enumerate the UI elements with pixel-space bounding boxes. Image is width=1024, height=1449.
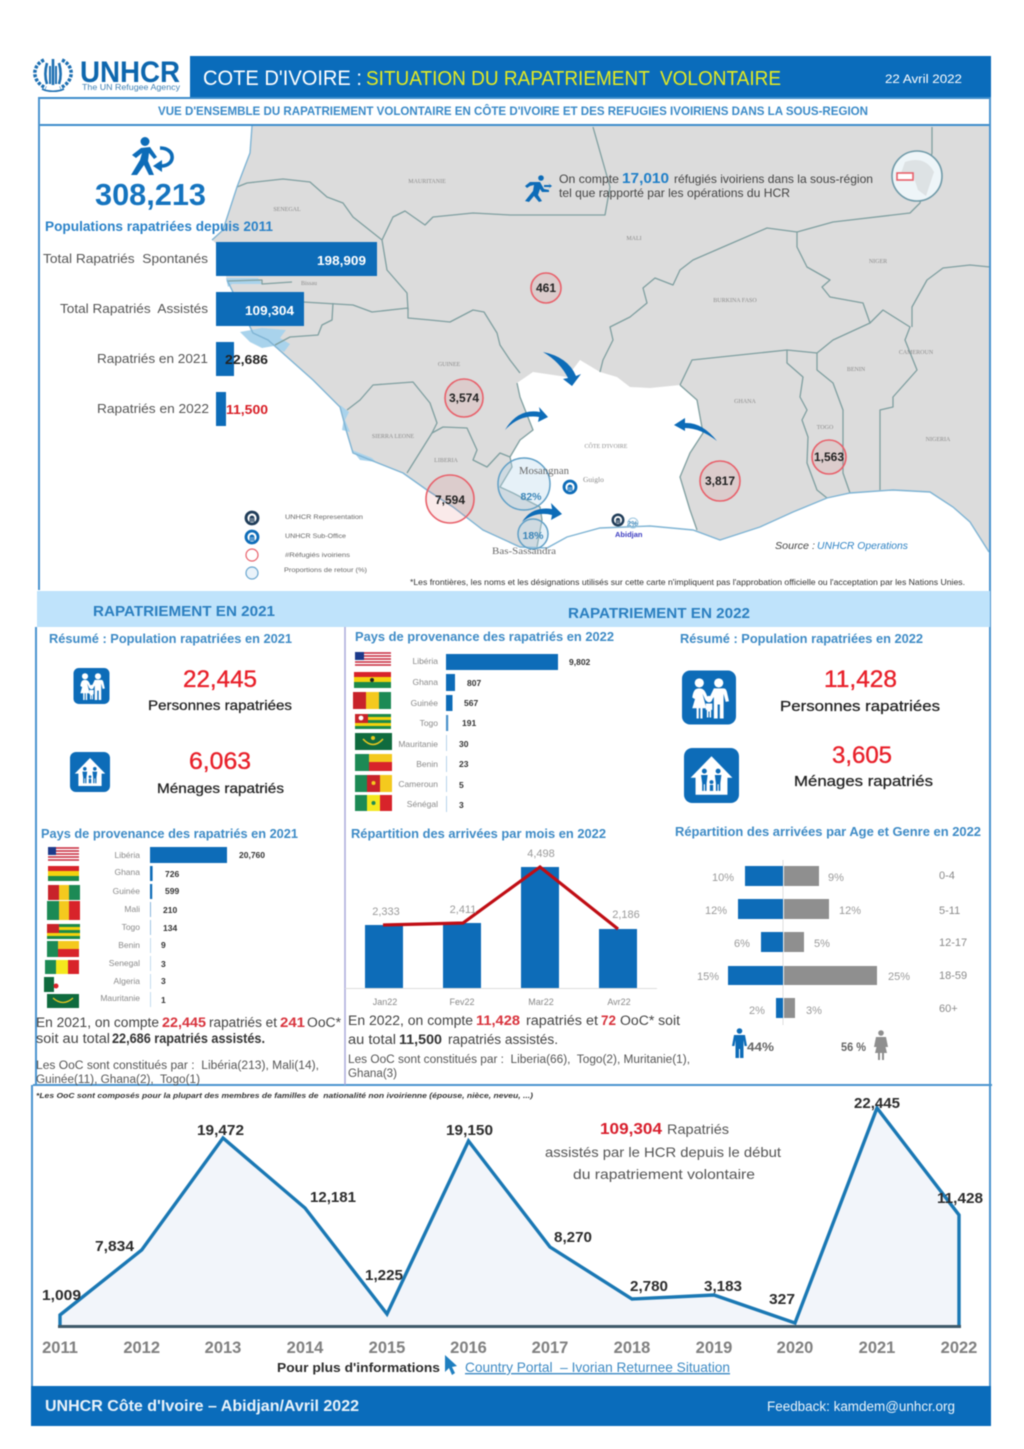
data labels <box>42 1096 983 1308</box>
refugee count circles <box>426 273 846 523</box>
year labels: 2017 <box>532 1339 568 1357</box>
country labels: Togo <box>122 922 140 932</box>
inset globe <box>892 151 942 201</box>
line <box>60 1108 959 1326</box>
persons repatriated: 22,445 <box>183 666 257 693</box>
country labels: Algeria <box>114 976 140 986</box>
text block: 2021 summary: 22,445 <box>162 1015 207 1030</box>
values: 9 <box>161 940 166 950</box>
map panel <box>212 126 990 587</box>
text block: 2022 summary: OoC* soit <box>620 1013 680 1028</box>
heading: 2022: RAPATRIEMENT EN 2022 <box>568 605 750 622</box>
country labels: Mali <box>124 904 140 914</box>
text block: 2021 summary: Les OoC sont constitués par : Libéria(213), Mali(14), <box>36 1060 319 1072</box>
panel: summary 2021: Résumé : Population rapatriées en 2021 <box>49 631 292 646</box>
map legend: #Réfugiés ivoiriens <box>285 553 350 559</box>
values: 3 <box>161 959 166 969</box>
values: 20,760 <box>239 850 265 860</box>
country labels: Mauritanie <box>398 739 438 749</box>
year labels: 2022 <box>941 1339 977 1357</box>
refugees in sub-region callout: tel que rapporté par les opérations du HCR <box>559 186 790 200</box>
source: UNHCR Operations <box>817 540 909 552</box>
footer <box>31 1386 991 1426</box>
title: COTE D'IVOIRE : <box>203 67 362 90</box>
bar chart: repatriation totals: Rapatriés en 2021 <box>97 351 208 366</box>
refugees in sub-region callout: On compte <box>559 172 619 186</box>
text block: 2022 summary <box>348 1013 690 1080</box>
date: 22 Avril 2022 <box>885 74 962 86</box>
bar chart: repatriation totals: Total Rapatriés Spontanés <box>43 251 209 266</box>
refugees in sub-region callout: réfugiés ivoiriens dans la sous-région <box>674 172 873 186</box>
text block: 2022 summary: Les OoC sont constitués par : Liberia(66), Togo(2), Muritanie(1), <box>348 1054 690 1066</box>
values <box>459 657 591 810</box>
bar chart: countries 2022 <box>446 654 558 812</box>
return share circles <box>498 458 550 549</box>
icon: male <box>732 1028 747 1058</box>
panel: origin countries 2021: Pays de provenance des rapatriés en 2021 <box>41 826 298 841</box>
country labels: Cameroun <box>398 779 438 789</box>
year labels: 2013 <box>205 1339 241 1357</box>
country labels: Senegal <box>109 958 140 968</box>
bar chart: repatriation totals: Total Rapatriés Assistés <box>60 301 209 316</box>
place labels: Mosangnan <box>519 465 569 477</box>
text block: 2021 summary: soit au total <box>36 1031 110 1046</box>
year labels: 2015 <box>369 1339 405 1357</box>
country labels: Mauritanie <box>100 993 140 1003</box>
values <box>161 850 265 1005</box>
percent labels: 5% <box>814 938 830 950</box>
UNHCR logo: The UN Refugee Agency <box>82 83 180 92</box>
subtitle strip: VUE D'ENSEMBLE DU RAPATRIEMENT VOLONTAIRE EN CÔTE D'IVOIRE ET DES REFUGIES IVOIRIENS DANS LA SOUS-REGION <box>158 105 868 118</box>
country labels: Togo <box>420 718 438 728</box>
total number: 308,213 <box>95 177 206 212</box>
source <box>775 540 909 552</box>
UNHCR logo <box>35 56 180 92</box>
return share circles: 18% <box>522 530 544 542</box>
country labels: Benin <box>118 940 140 950</box>
return share circles: 82% <box>520 491 542 503</box>
country labels: GHANA <box>734 399 756 405</box>
percent labels: 2% <box>749 1005 765 1017</box>
months: Mar22 <box>528 997 554 1007</box>
text block: 2022 summary: rapatriés et <box>526 1013 598 1028</box>
footer: Feedback: kamdem@unhcr.org <box>767 1399 955 1414</box>
year labels: 2016 <box>450 1339 487 1357</box>
values: 23 <box>459 759 469 769</box>
year labels: 2019 <box>696 1339 732 1357</box>
country labels: Libéria <box>114 850 140 860</box>
percent labels: 3% <box>806 1005 822 1017</box>
text block: 2021 summary: 241 <box>280 1015 306 1030</box>
values <box>372 848 640 921</box>
data labels: 8,270 <box>554 1230 592 1246</box>
values: 4,498 <box>527 848 555 860</box>
country labels: Benin <box>416 759 438 769</box>
age labels <box>939 870 967 1015</box>
country labels: Bissau <box>301 281 317 287</box>
flags <box>44 847 80 1008</box>
map disclaimer: *Les frontières, les noms et les désignations utilisés sur cette carte n'impliquent pas l'approbation officielle ou l'acceptation par les Nations Unies. <box>410 577 965 587</box>
refugee counts: 3,574 <box>449 391 479 405</box>
text block: 2022 summary: 11,500 <box>399 1032 442 1047</box>
data labels: 22,445 <box>854 1096 900 1112</box>
values: 2,333 <box>372 906 400 918</box>
country labels: CÔTE D'IVOIRE <box>585 442 628 450</box>
data labels: 7,834 <box>95 1239 134 1255</box>
country labels: NIGERIA <box>926 437 951 443</box>
text block: 2021 summary <box>36 1015 342 1086</box>
female bars <box>784 866 877 1018</box>
households repatriated: 6,063 <box>189 748 251 775</box>
text block: 2021 summary: rapatriés et <box>209 1015 277 1030</box>
panel: summary 2022 <box>680 631 940 803</box>
borders <box>228 127 990 547</box>
bars <box>365 867 637 988</box>
refugee counts: 7,594 <box>435 493 465 507</box>
percent labels: 12% <box>705 905 727 917</box>
months <box>373 997 631 1007</box>
households repatriated: 3,605 <box>832 742 892 769</box>
footer: UNHCR Côte d'Ivoire – Abidjan/Avril 2022 <box>45 1398 359 1415</box>
refugees in sub-region callout: 17,010 <box>622 170 669 187</box>
column divider <box>344 627 346 1085</box>
data labels: 19,472 <box>197 1123 244 1139</box>
percent labels: 25% <box>888 971 910 983</box>
data labels: 327 <box>769 1292 795 1308</box>
title: SITUATION DU RAPATRIEMENT VOLONTAIRE <box>366 68 781 90</box>
refugee counts: 461 <box>536 281 556 295</box>
text block: 2022 summary: 72 <box>601 1013 616 1028</box>
Côte d'Ivoire <box>500 360 703 548</box>
data labels: 2,780 <box>630 1279 668 1295</box>
land <box>212 126 989 552</box>
source: Source : <box>775 540 815 552</box>
data labels: 12,181 <box>310 1190 356 1206</box>
bar chart: countries 2021 <box>150 847 227 1007</box>
subtitle strip <box>39 98 990 125</box>
map legend: UNHCR Sub-Office <box>285 534 347 540</box>
panel: origin countries 2022: Pays de provenance des rapatriés en 2022 <box>355 629 614 644</box>
values: 807 <box>467 678 481 688</box>
panel: age and gender pyramid: Répartition des arrivées par Age et Genre en 2022 <box>675 824 981 839</box>
bar chart: repatriation totals: 198,909 <box>317 253 366 268</box>
return arrows <box>505 352 717 522</box>
values: 9,802 <box>569 657 591 667</box>
more information link: Country Portal – Ivorian Returnee Situation <box>465 1359 730 1375</box>
text block: 2021 summary: En 2021, on compte <box>36 1015 159 1030</box>
panel: monthly arrivals 2022 <box>345 826 657 1007</box>
year labels: 2012 <box>123 1339 160 1357</box>
country labels <box>398 656 438 809</box>
place labels: Guiglo <box>583 475 604 484</box>
percent labels: 6% <box>734 938 750 950</box>
male bars <box>728 866 783 1018</box>
percent labels: 12% <box>839 905 861 917</box>
callout: assisted total: du rapatriement volontaire <box>573 1166 755 1182</box>
place labels: Bas-Sassandra <box>492 546 556 556</box>
country labels: TOGO <box>817 425 834 431</box>
country labels: SENEGAL <box>273 207 301 213</box>
area chart: assisted repatriation by year <box>42 1096 983 1357</box>
age labels: 18-59 <box>939 970 967 982</box>
icon: family <box>682 670 736 724</box>
bar chart: repatriation totals <box>43 242 377 426</box>
percent labels <box>697 872 910 1017</box>
icon: household <box>684 748 739 803</box>
values: 599 <box>165 886 179 896</box>
bar chart: repatriation totals: Rapatriés en 2022 <box>97 401 209 416</box>
text block: 2021 summary: 22,686 rapatriés assistés. <box>112 1031 265 1046</box>
age labels: 0-4 <box>939 870 955 882</box>
panel: monthly arrivals 2022: Répartition des arrivées par mois en 2022 <box>351 826 606 841</box>
bar chart: repatriation totals: 22,686 <box>225 352 268 367</box>
trend line <box>383 867 618 929</box>
country labels: Guinée <box>113 886 140 896</box>
country labels: CAMEROUN <box>899 350 934 356</box>
refugee counts <box>435 281 844 507</box>
values: 30 <box>459 739 469 749</box>
icon: running refugee <box>525 175 552 202</box>
more information link: Pour plus d'informations <box>277 1360 440 1375</box>
households repatriated <box>157 748 284 796</box>
country labels: SIERRA LEONE <box>372 434 414 440</box>
area <box>60 1108 959 1326</box>
data labels: 19,150 <box>446 1123 493 1139</box>
text block: 2022 summary: rapatriés assistés. <box>448 1032 558 1047</box>
country labels: Ghana <box>114 867 140 877</box>
icon: household <box>70 752 110 792</box>
percent labels: 15% <box>697 971 719 983</box>
country labels: BENIN <box>847 367 866 373</box>
text block: 2021 summary: Guinée(11), Ghana(2), Togo(1) <box>36 1074 200 1086</box>
title <box>203 67 781 90</box>
text block: 2021 summary: OoC* <box>307 1015 342 1030</box>
office icons <box>564 481 638 528</box>
percent labels: 9% <box>828 872 844 884</box>
refugee counts: 1,563 <box>814 450 844 464</box>
persons repatriated: 11,428 <box>824 666 897 693</box>
data labels: 1,009 <box>42 1288 81 1304</box>
map legend <box>246 512 367 579</box>
values: 1 <box>161 995 166 1005</box>
values: 210 <box>163 905 177 915</box>
values: 567 <box>464 698 478 708</box>
refugee counts: 3,817 <box>705 474 735 488</box>
heading: 2021: RAPATRIEMENT EN 2021 <box>93 603 275 620</box>
place labels <box>492 465 643 556</box>
values: 2,411 <box>450 904 476 916</box>
values: 134 <box>163 923 177 933</box>
values: 5 <box>459 780 464 790</box>
text block: 2022 summary: au total <box>348 1032 396 1047</box>
country labels: Sénégal <box>407 799 438 809</box>
panel: summary 2022: Résumé : Population rapatriées en 2022 <box>680 631 923 646</box>
bar chart: repatriation totals: 109,304 <box>245 303 295 318</box>
map legend: UNHCR Representation <box>285 515 363 521</box>
data labels: 11,428 <box>937 1191 983 1207</box>
persons repatriated <box>780 666 940 715</box>
year labels: 2014 <box>287 1339 324 1357</box>
header banner <box>190 56 991 98</box>
icon: cursor <box>445 1355 457 1375</box>
callout: assisted total: 109,304 <box>600 1121 662 1138</box>
country labels: Guinée <box>411 698 438 708</box>
households repatriated <box>794 742 933 790</box>
icon: female <box>874 1030 888 1060</box>
country labels: NIGER <box>869 259 887 265</box>
values: 726 <box>165 869 179 879</box>
coastline <box>212 126 989 552</box>
male share: 44% <box>747 1040 774 1054</box>
callout: assisted total: Rapatriés <box>667 1121 729 1137</box>
households repatriated: Ménages rapatriés <box>157 780 284 796</box>
country labels: Ghana <box>412 677 438 687</box>
logo emblem <box>35 59 71 91</box>
households repatriated: Ménages rapatriés <box>794 773 933 790</box>
year labels: 2011 <box>42 1339 78 1357</box>
percent labels: 10% <box>712 872 734 884</box>
year labels <box>42 1339 977 1357</box>
year labels: 2018 <box>614 1339 650 1357</box>
refugees in sub-region callout <box>525 170 873 202</box>
panel: repatriated total <box>43 137 377 426</box>
panel: summary 2021 <box>49 631 292 796</box>
months: Fev22 <box>449 997 475 1007</box>
text block: 2022 summary: Ghana(3) <box>348 1068 397 1080</box>
axis <box>345 988 657 990</box>
estuaries <box>226 278 376 462</box>
icon: family <box>74 668 110 704</box>
panel: origin countries 2022 <box>353 629 614 812</box>
data labels: 3,183 <box>704 1279 742 1295</box>
place labels: Abidjan <box>615 530 643 539</box>
country labels <box>273 179 951 464</box>
values: 2,186 <box>612 909 640 921</box>
footnote: *Les OoC sont composés pour la plupart des membres de familles de nationalité non ivoirienne (épouse, nièce, neveu, ...) <box>36 1091 534 1100</box>
female share: 56 % <box>841 1040 866 1054</box>
values: 3 <box>161 976 166 986</box>
text block: 2022 summary: En 2022, on compte <box>348 1013 473 1028</box>
age labels: 60+ <box>939 1003 958 1015</box>
age labels: 12-17 <box>939 937 967 949</box>
months: Jan22 <box>373 997 397 1007</box>
data labels: 1,225 <box>365 1268 403 1284</box>
total label: Populations rapatriées depuis 2011 <box>45 219 273 234</box>
more information link <box>277 1355 730 1375</box>
country labels: GUINEE <box>438 362 460 368</box>
map legend: Proportions de retour (%) <box>284 568 367 574</box>
panel: age and gender pyramid <box>675 824 981 1060</box>
country labels: Libéria <box>412 656 438 666</box>
country labels: MALI <box>626 236 642 242</box>
year labels: 2020 <box>777 1339 813 1357</box>
panel: origin countries 2021 <box>41 826 298 1008</box>
age labels: 5-11 <box>939 905 960 917</box>
persons repatriated: Personnes rapatriées <box>148 697 292 713</box>
icon: walking person returning <box>131 137 172 175</box>
country labels: LIBERIA <box>434 458 458 464</box>
months: Avr22 <box>607 997 631 1007</box>
bar chart: repatriation totals: 11,500 <box>226 402 268 417</box>
country labels: BURKINA FASO <box>713 298 757 304</box>
text block: 2022 summary: 11,428 <box>476 1013 521 1028</box>
values: 191 <box>462 718 476 728</box>
country labels <box>100 850 140 1003</box>
flags <box>353 652 392 811</box>
values: 3 <box>459 800 464 810</box>
place labels: 2% <box>627 519 638 528</box>
persons repatriated: Personnes rapatriées <box>780 698 940 715</box>
callout: assisted total <box>545 1121 781 1182</box>
year labels: 2021 <box>859 1339 895 1357</box>
persons repatriated <box>148 666 292 713</box>
callout: assisted total: assistés par le HCR depuis le début <box>545 1144 781 1160</box>
country labels: MAURITANIE <box>408 179 446 185</box>
logo wordmark: UNHCR <box>80 56 180 89</box>
axis <box>58 1325 961 1328</box>
section band <box>37 591 990 627</box>
